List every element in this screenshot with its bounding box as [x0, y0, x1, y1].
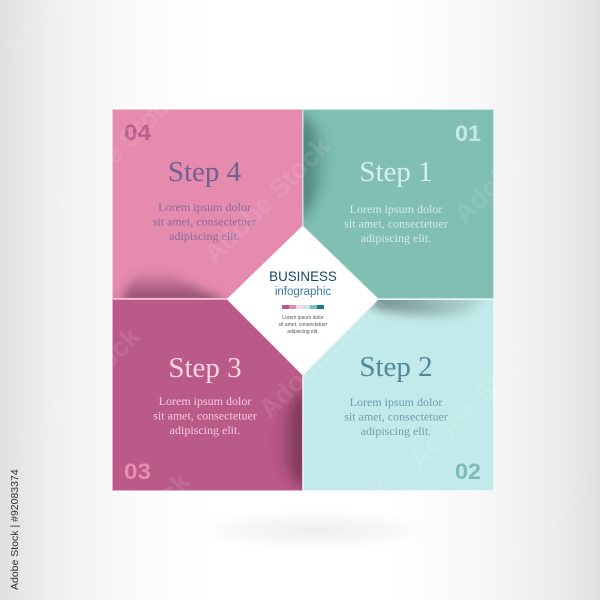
watermarks: Adobe Stock	[403, 336, 542, 474]
step 3 title: Step 3	[168, 352, 242, 384]
watermarks: Adobe Stock	[48, 81, 187, 219]
number 04: 04	[124, 120, 152, 145]
step 4 title: Step 4	[168, 156, 242, 188]
number 01: 01	[455, 121, 481, 146]
panel: step 4	[112, 109, 303, 304]
panel: step 1	[296, 109, 494, 299]
center text: sit amet, consectetuer	[279, 322, 328, 328]
number 03: 03	[124, 459, 151, 484]
step 1 text	[344, 202, 448, 245]
watermarks: Adobe	[448, 149, 529, 229]
step 3 text: sit amet, consectetuer	[153, 408, 257, 422]
step 1 text: sit amet, consectetuer	[344, 216, 448, 230]
step 1 title: Step 1	[359, 156, 433, 188]
step 4 text: sit amet, consectetuer	[153, 214, 256, 228]
step 2 text	[344, 395, 448, 438]
colour legend	[282, 305, 324, 309]
center text: adipiscing elit.	[287, 329, 319, 335]
step 3 text	[153, 394, 257, 437]
center heading: BUSINESS	[269, 269, 337, 284]
center text: Lorem ipsum dolor	[282, 315, 324, 321]
step 2 title: Step 2	[359, 351, 433, 383]
center text	[279, 315, 328, 335]
step 3 text: Lorem ipsum dolor	[159, 394, 251, 408]
stock id text: Adobe Stock | #92083374	[9, 469, 21, 590]
step 4 text: adipiscing elit.	[169, 229, 240, 243]
center diamond	[227, 226, 378, 375]
number 02: 02	[455, 459, 481, 484]
watermarks: ck	[133, 76, 176, 119]
center subheading: infographic	[275, 286, 331, 298]
panel: step 3	[112, 299, 310, 492]
step 4 text	[153, 200, 256, 243]
step 2 text: adipiscing elit.	[361, 424, 431, 438]
step 4 text: Lorem ipsum dolor	[158, 200, 251, 214]
step 3 text: adipiscing elit.	[170, 423, 240, 437]
step 2 text: sit amet, consectetuer	[344, 410, 448, 424]
floor shadow	[175, 508, 455, 552]
watermarks: Adobe Stock	[253, 286, 392, 424]
watermarks: Adobe Stock	[8, 321, 147, 459]
step 1 text: adipiscing elit.	[361, 231, 431, 245]
panel: step 2	[302, 292, 494, 491]
watermarks: Adobe Stock	[198, 131, 337, 269]
step 2 text: Lorem ipsum dolor	[350, 395, 442, 409]
step 1 text: Lorem ipsum dolor	[350, 202, 442, 216]
watermarks: Adobe	[398, 0, 479, 79]
